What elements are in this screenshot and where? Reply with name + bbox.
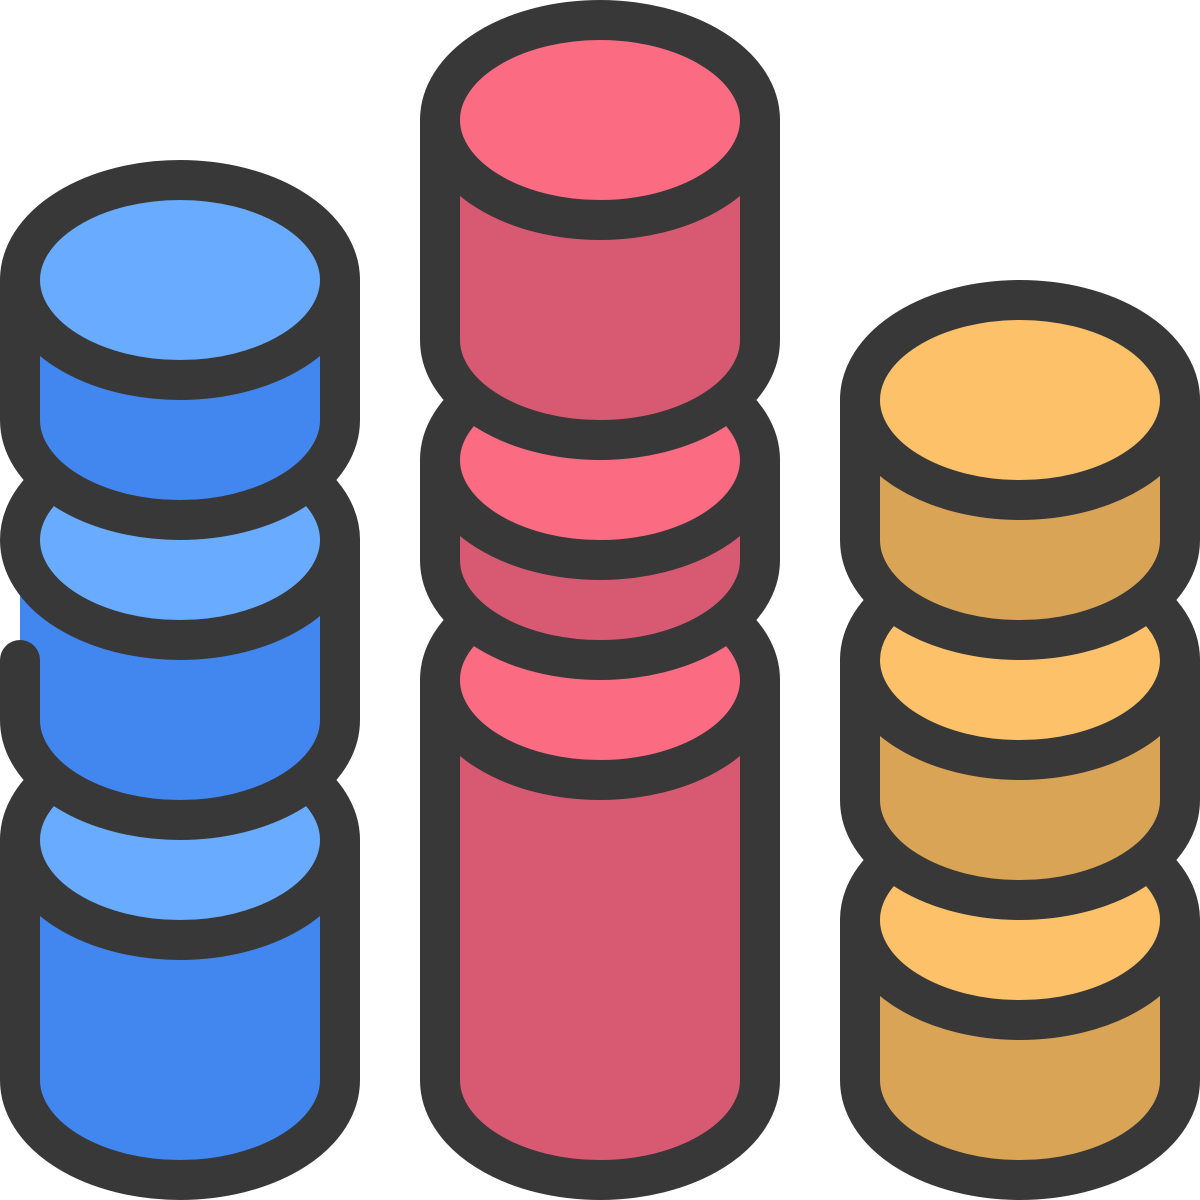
red stack middle segment — [440, 360, 760, 660]
orange stack bottom segment — [860, 820, 1180, 1180]
blue stack bottom segment — [20, 740, 340, 1180]
blue stack middle segment — [20, 440, 340, 820]
orange coin stack — [860, 300, 1180, 1180]
red stack top segment — [440, 20, 760, 440]
red stack bottom segment — [440, 580, 760, 1180]
orange stack middle segment — [860, 560, 1180, 900]
blue coin stack — [20, 180, 340, 1180]
red coin stack — [440, 20, 760, 1180]
blue stack top segment — [20, 180, 340, 520]
orange stack top segment — [860, 300, 1180, 640]
